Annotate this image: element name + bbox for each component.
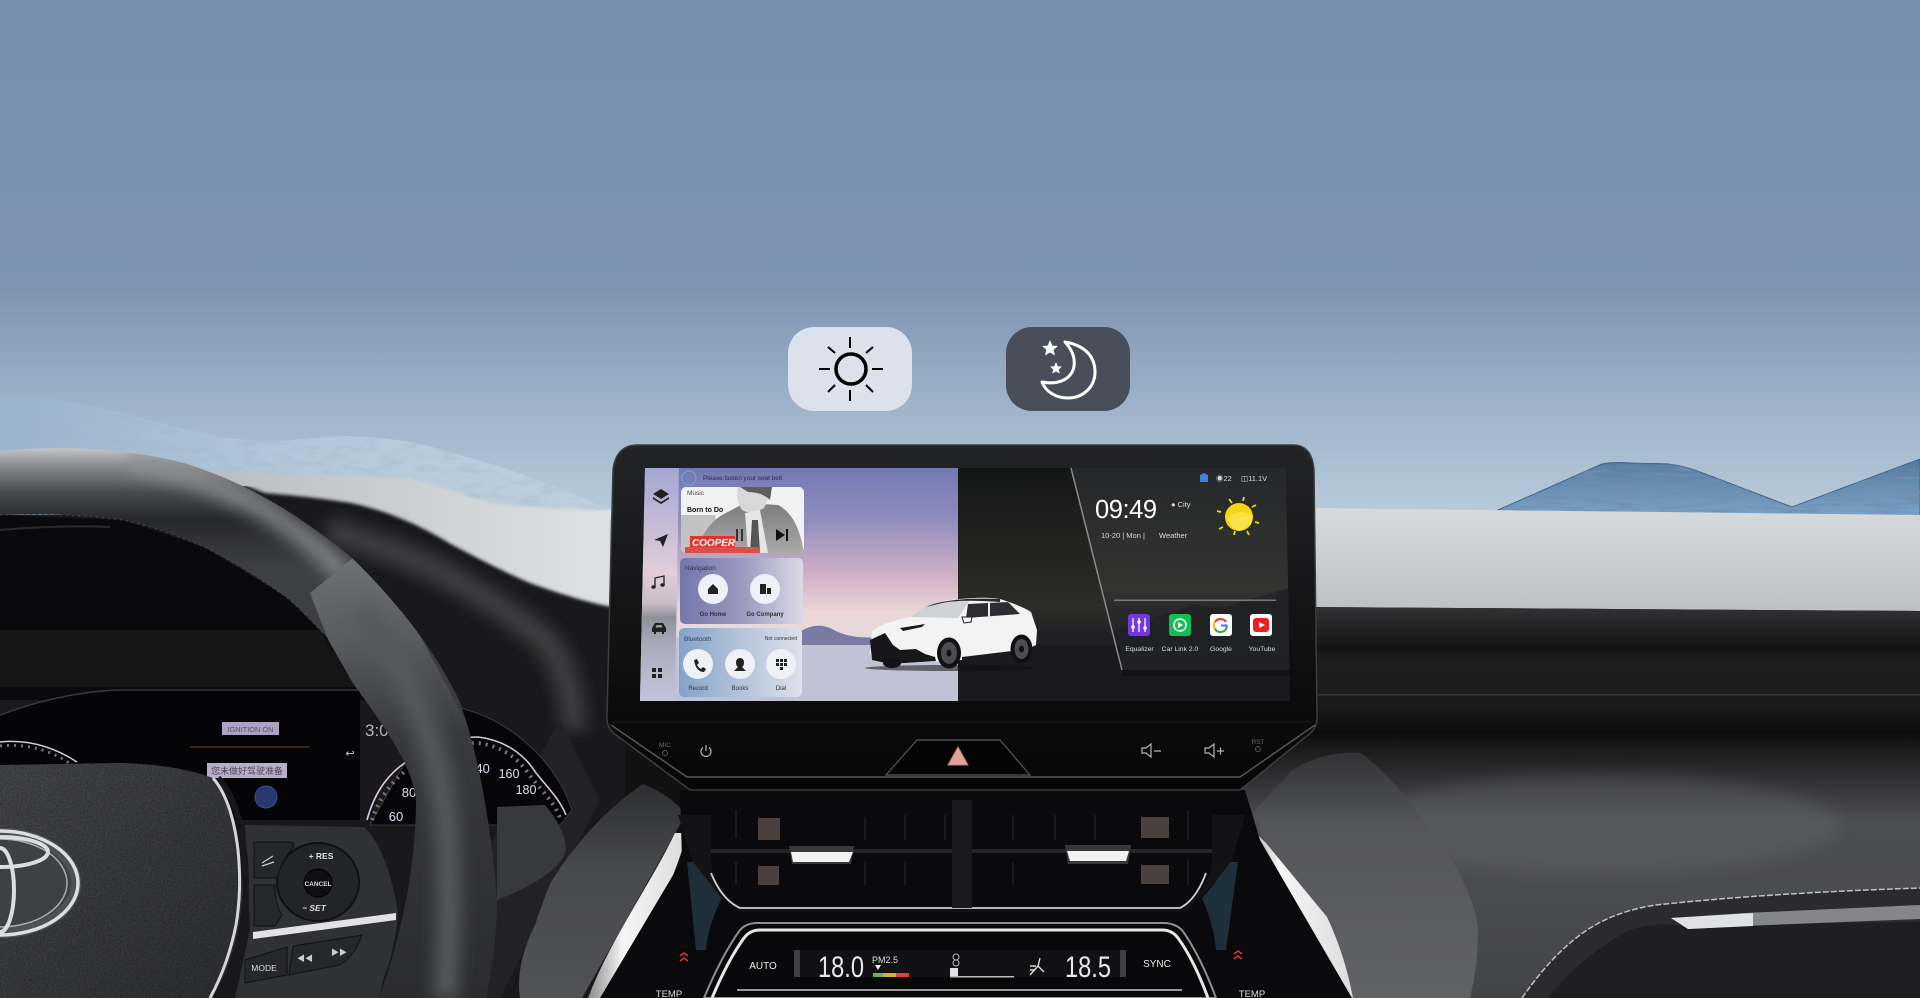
bluetooth card: Books	[732, 686, 748, 692]
right dashboard leather	[1240, 775, 1920, 998]
instrument cluster: 80	[402, 785, 416, 800]
front bumper	[870, 633, 936, 664]
diagonal panel edge	[1071, 468, 1122, 670]
centre console body	[600, 790, 1352, 998]
steering wheel rim	[0, 448, 497, 998]
glossy console reflections	[687, 862, 1238, 950]
instrument cluster	[0, 690, 572, 825]
night mountains	[1178, 588, 1288, 610]
lower sill	[962, 651, 1012, 661]
night panel	[1072, 468, 1288, 597]
chrome frame	[704, 923, 1216, 998]
steering wheel spoke: ▶▶	[331, 948, 347, 957]
speedometer arc	[367, 737, 566, 820]
climate control panel: AUTO	[749, 961, 777, 972]
touch button panel outline	[611, 725, 1315, 777]
steering wheel spoke: + RES	[309, 851, 334, 861]
navigation card: Go Home	[700, 612, 727, 618]
sidebar	[640, 468, 679, 701]
vent centre stalk	[952, 800, 972, 908]
icon: air flow	[1030, 958, 1044, 975]
white SUV	[865, 598, 1037, 671]
stalk behind wheel	[497, 805, 566, 900]
screen: night theme half: ◫11.1V	[1241, 474, 1267, 483]
assistant ring	[682, 471, 696, 485]
climate control panel: PM2.5	[872, 955, 898, 965]
screen: night theme half: Weather	[1159, 531, 1188, 540]
navigation card: Navigation	[685, 565, 716, 572]
app: youtube: YouTube	[1249, 646, 1276, 653]
inner hood bands	[0, 515, 365, 700]
icon: volume up	[1205, 744, 1224, 757]
headlight	[900, 624, 925, 631]
app: car link	[1162, 614, 1199, 653]
steering wheel spoke	[235, 825, 398, 998]
status boxes	[222, 722, 279, 735]
steering wheel spoke: − SET	[302, 903, 327, 913]
status bar	[1200, 473, 1208, 482]
music card: Born to Do	[687, 507, 723, 514]
touch labels: MIC	[659, 742, 671, 749]
chrome hub trim	[216, 778, 246, 998]
app: car link: Car Link 2.0	[1162, 646, 1199, 653]
left dark interior	[0, 485, 625, 998]
music card: Music	[687, 490, 705, 497]
app: youtube	[1249, 614, 1276, 653]
instrument cluster: 180	[516, 783, 536, 797]
navigation card	[680, 558, 803, 624]
sidebar icon: navigation	[654, 534, 668, 547]
sidebar icon: grid	[652, 668, 662, 678]
app: google: Google	[1210, 646, 1232, 653]
music controls	[736, 529, 743, 541]
track buttons	[289, 935, 362, 975]
screen: night theme half	[958, 468, 1290, 701]
instrument cluster: 160	[499, 767, 519, 781]
music card: COOPER	[692, 538, 736, 549]
app: equalizer: Equalizer	[1125, 646, 1154, 653]
sidebar icon: car	[652, 623, 666, 634]
mirror	[962, 617, 972, 623]
climate control panel: 18.5	[1065, 951, 1111, 984]
sidebar icon: layers	[653, 489, 669, 504]
left dashboard top	[208, 471, 612, 730]
instrument cluster: 140	[468, 761, 490, 776]
seat belt notice: Please,fasten your seat belt	[703, 475, 782, 482]
bluetooth card: Dial	[776, 686, 786, 692]
music card	[681, 487, 804, 553]
head unit housing	[607, 445, 1317, 790]
side windows	[966, 602, 1020, 618]
head unit housing: RST	[1252, 739, 1265, 746]
air vents	[678, 800, 1245, 912]
climate control panel: 18.0	[818, 951, 864, 984]
screen: day theme half	[640, 468, 958, 701]
app row divider	[1114, 600, 1276, 601]
instrument cluster: ↩	[345, 748, 355, 760]
bluetooth card	[679, 628, 802, 697]
app: google	[1210, 614, 1232, 653]
left control buttons	[254, 842, 294, 878]
steering wheel spoke: MODE	[251, 963, 277, 973]
emblem	[0, 831, 78, 935]
right knee pad	[1253, 753, 1478, 998]
car body	[870, 598, 1037, 664]
clock: 09:49	[1095, 496, 1157, 524]
bluetooth card: Record	[688, 686, 708, 692]
sidebar icon: music	[651, 576, 665, 589]
instrument cluster: 60	[389, 809, 403, 824]
right chrome trim	[1240, 823, 1353, 998]
vent brown squares	[758, 817, 1169, 885]
lower interior base	[1100, 607, 1920, 998]
cruise control dial	[277, 843, 359, 921]
screen: night theme half: ● City	[1171, 500, 1191, 509]
mode button	[245, 947, 287, 983]
glove box panel	[1522, 888, 1920, 998]
hazard trapezoid	[886, 740, 1030, 775]
screen: night theme half: 10-20 | Mon |	[1101, 531, 1145, 540]
hazard triangle	[948, 747, 968, 765]
right dashboard top	[1310, 508, 1920, 611]
far front wheel	[883, 658, 901, 668]
left gauge arc	[0, 741, 77, 762]
steering wheel spoke: CANCEL	[304, 881, 332, 888]
icon: fan	[953, 954, 959, 966]
left chrome trim	[588, 833, 687, 998]
rear wheel	[1010, 634, 1032, 664]
chrome spoke strip	[253, 913, 396, 939]
sky background	[0, 0, 1920, 520]
screen: night theme half: ◉22	[1216, 474, 1232, 483]
navigation card: Go Company	[746, 612, 784, 618]
icon: volume down	[1142, 744, 1161, 757]
icon: weather sun	[1217, 497, 1259, 535]
icon: power	[701, 745, 711, 756]
chrome trim strip	[1671, 905, 1920, 929]
windshield	[910, 600, 970, 618]
lavender mountains	[790, 626, 958, 646]
app: equalizer	[1125, 614, 1154, 653]
bluetooth card: Bluetooth	[684, 636, 712, 643]
icon: moon and stars	[1042, 340, 1095, 398]
bluetooth card: Not connected	[765, 636, 797, 642]
instrument cluster: 您未做好驾驶准备	[211, 765, 283, 776]
night mode button	[1006, 327, 1130, 411]
right blue mountains	[1498, 459, 1920, 520]
climate control panel	[656, 923, 1265, 998]
instrument cluster: IGNITION ON	[228, 725, 274, 734]
left console side pad	[440, 720, 686, 998]
climate control panel: SYNC	[1143, 959, 1171, 970]
icon: sun	[819, 337, 883, 401]
day mode button	[788, 327, 912, 411]
front wheel	[937, 638, 961, 668]
left snowy mountains	[0, 419, 600, 515]
climate display strip	[794, 950, 1126, 977]
steering wheel spoke: ◀◀	[297, 954, 313, 963]
instrument cluster: 3:0	[365, 721, 389, 740]
chrome vent tabs	[789, 846, 854, 864]
steering wheel hub	[0, 760, 250, 998]
